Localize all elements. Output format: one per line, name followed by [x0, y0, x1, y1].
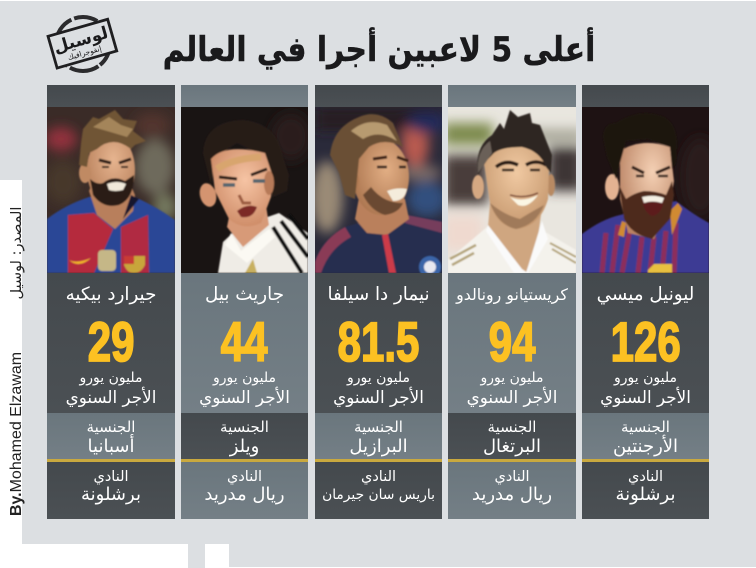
salary unit: مليون يورو	[347, 370, 410, 386]
name panel	[315, 273, 442, 413]
club value: برشلونة	[81, 484, 141, 505]
nationality label: الجنسية	[220, 418, 269, 436]
nationality panel	[181, 413, 308, 459]
salary unit: مليون يورو	[614, 370, 677, 386]
name panel	[181, 273, 308, 413]
photo: Pique	[47, 107, 175, 273]
photo: Messi	[582, 107, 709, 273]
logo stamp: إنفوجرافيك	[67, 44, 103, 62]
player name: ليونيل ميسي	[597, 284, 694, 305]
salary unit: مليون يورو	[213, 370, 276, 386]
nationality value: البرتغال	[483, 436, 541, 457]
salary number: 81.5	[338, 310, 419, 373]
background panel	[0, 1, 756, 180]
player name: نيمار دا سيلفا	[327, 284, 430, 305]
logo stamp	[46, 15, 118, 73]
salary number: 44	[221, 310, 268, 373]
salary label: الأجر السنوي	[467, 387, 557, 407]
salary number: 126	[610, 310, 681, 373]
salary label: الأجر السنوي	[600, 387, 691, 407]
photo: Ronaldo	[448, 107, 576, 273]
nationality value: الأرجنتين	[613, 436, 678, 457]
column: Lionel Messi	[582, 85, 709, 519]
player name: جاريث بيل	[205, 284, 284, 305]
club value: ريال مدريد	[204, 484, 285, 505]
club panel	[315, 462, 442, 519]
club value: ريال مدريد	[472, 484, 552, 505]
logo stamp: لوسيل	[51, 23, 111, 58]
nationality label: الجنسية	[354, 418, 403, 436]
column: Cristiano Ronaldo	[448, 85, 576, 519]
nationality panel	[315, 413, 442, 459]
nationality value: أسبانيا	[88, 436, 134, 457]
salary unit: مليون يورو	[480, 370, 543, 386]
column: Gerard Pique	[47, 85, 175, 519]
salary unit: مليون يورو	[80, 370, 142, 386]
club value: باريس سان جيرمان	[322, 487, 435, 503]
salary label: الأجر السنوي	[66, 387, 156, 407]
nationality panel	[582, 413, 709, 459]
club label: النادي	[93, 469, 129, 485]
salary label: الأجر السنوي	[333, 387, 424, 407]
photo: Neymar	[315, 107, 442, 273]
nationality value: البرازيل	[349, 436, 408, 457]
nationality panel	[47, 413, 175, 459]
club panel	[47, 462, 175, 519]
photo: Bale	[181, 107, 308, 273]
player name: جيرارد بيكيه	[66, 284, 156, 305]
club panel	[448, 462, 576, 519]
name panel	[47, 273, 175, 413]
author credit: By.Mohamed Elzawam	[8, 352, 25, 516]
name panel	[582, 273, 709, 413]
title: أعلى 5 لاعبين أجرا في العالم	[163, 30, 595, 70]
club label: النادي	[628, 469, 663, 485]
player name: كريستيانو رونالدو	[456, 285, 568, 304]
club panel	[582, 462, 709, 519]
club label: النادي	[361, 469, 396, 485]
column: Gareth Bale	[181, 85, 308, 519]
nationality label: الجنسية	[488, 418, 536, 436]
name panel	[448, 273, 576, 413]
club label: النادي	[494, 469, 530, 485]
nationality label: الجنسية	[621, 418, 670, 436]
salary number: 94	[489, 310, 535, 373]
source credit: المصدر: لوسيل	[9, 207, 25, 299]
nationality value: ويلز	[230, 436, 259, 457]
nationality panel	[448, 413, 576, 459]
club label: النادي	[227, 469, 262, 485]
nationality label: الجنسية	[87, 418, 135, 436]
club panel	[181, 462, 308, 519]
club value: برشلونة	[616, 484, 675, 505]
salary number: 29	[88, 310, 134, 373]
salary label: الأجر السنوي	[199, 387, 290, 407]
column: Neymar	[315, 85, 442, 519]
